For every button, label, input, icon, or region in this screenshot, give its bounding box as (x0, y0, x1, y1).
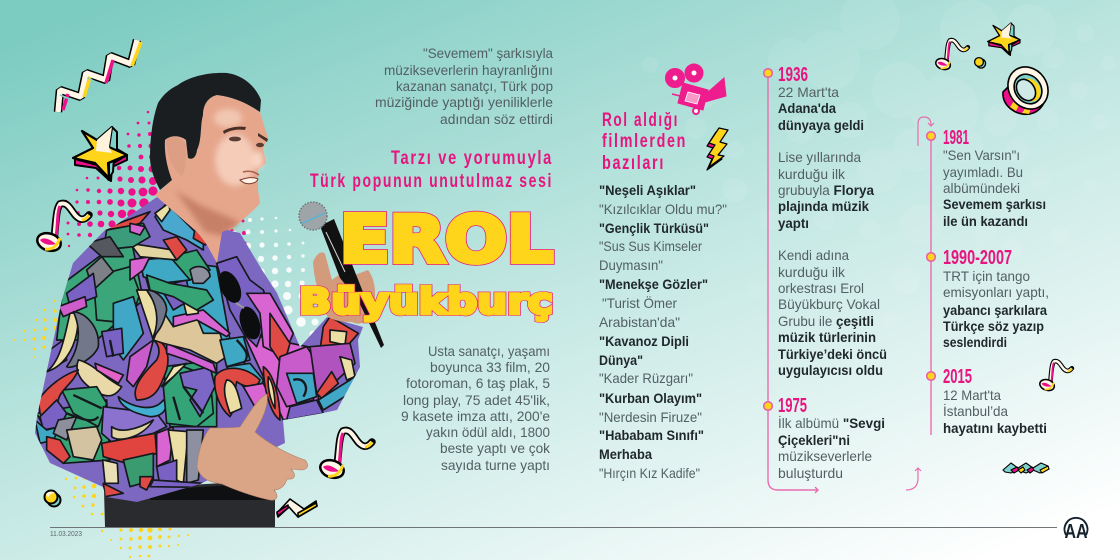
icon: zigzag near pants (277, 499, 317, 517)
film list: "Hırçın Kız Kadife" (599, 466, 700, 481)
icon: ring (1000, 59, 1056, 117)
timeline entries 1: Büyükburç Vokal (778, 297, 880, 312)
timeline entries 1: orkestrası Erol (778, 281, 864, 296)
intro text: adından söz ettirdi (440, 112, 553, 127)
background bubbles (642, 0, 1116, 328)
date: 11.03.2023 (50, 529, 82, 538)
main title: name: EROL (340, 204, 553, 278)
timeline entries 2: 12 Mart'ta (943, 388, 1001, 403)
film list: Merhaba (599, 447, 652, 462)
icon: small dot top right (975, 58, 986, 68)
shirt (30, 190, 370, 510)
film list: Duymasın" (599, 258, 663, 273)
eyes, brows, mouth (223, 127, 268, 142)
timeline entries 1: Çiçekleri"ni (778, 433, 850, 448)
timeline entries 2: TRT için tango (943, 269, 1030, 284)
timeline markers 2 (927, 132, 935, 380)
main title: name: Büyükburç (299, 282, 553, 322)
film list: "Hababam Sınıfı" (599, 428, 704, 443)
biography text: boyunca 33 film, 20 (430, 360, 550, 375)
icon: large zigzag (58, 40, 141, 112)
film list: Dünya" (599, 353, 643, 368)
intro text: müziğinde yaptığı yeniliklerle (375, 95, 553, 110)
timeline line 1 (768, 73, 818, 493)
biography text: long play, 75 adet 45'lik, (403, 393, 550, 408)
subtitle: Tarzı ve yorumuyla (391, 148, 553, 169)
timeline entries 1: 22 Mart'ta (778, 85, 839, 100)
film list: "Kızılcıklar Oldu mu?" (599, 202, 727, 217)
biography text: 9 kasete imza attı, 200'e (401, 409, 550, 424)
halftone: pink dots (65, 111, 246, 247)
timeline entries 1: uygulayıcısı oldu (778, 363, 883, 378)
timeline entries 1: Türkiye’deki öncü (778, 347, 887, 362)
film list: "Kurban Olayım" (599, 391, 702, 406)
icon: star top right (988, 23, 1020, 55)
timeline entries 1: 1936 (778, 64, 808, 86)
timeline entries 1: müzikseverlerle (778, 449, 872, 464)
photo: man with microphone (30, 73, 384, 527)
timeline entries 1: yaptı (778, 216, 809, 231)
timeline entries 1: İlk albümü "Sevgi (778, 414, 885, 431)
timeline entries 1: Adana'da (778, 101, 836, 116)
main title: name (299, 204, 553, 322)
icon: music note top right (934, 40, 968, 71)
biography text (401, 344, 550, 473)
intro text: kazanan sanatçı, Türk pop (396, 79, 553, 94)
skin: face and neck (155, 95, 268, 270)
intro text: "Sevemem" şarkısıyla (423, 46, 553, 61)
timeline entries 1: müzik türlerinin (778, 330, 876, 345)
upper hand (313, 252, 375, 324)
lower hand (197, 394, 308, 500)
halftone: yellow dots (14, 300, 189, 558)
timeline entries 1: kurduğu ilk (778, 265, 845, 280)
pants (104, 480, 275, 527)
timeline entries 2: albümündeki (943, 181, 1020, 196)
timeline entries 1: kurduğu ilk (778, 167, 845, 182)
timeline entries 1 (778, 64, 887, 481)
film list: "Kavanoz Dipli (599, 334, 689, 349)
sunglasses (214, 268, 264, 342)
hair (150, 73, 261, 190)
biography text: sayıda turne yaptı (441, 458, 550, 473)
icon: music note left (35, 203, 89, 254)
timeline entries 2: emisyonları yaptı, (943, 285, 1049, 300)
films heading (602, 110, 687, 174)
microphone (299, 202, 384, 348)
timeline entries 2: 2015 (943, 366, 972, 388)
film list: "Gençlik Türküsü" (599, 221, 709, 236)
ear (166, 137, 186, 176)
timeline entries 1: Kendi adına (778, 248, 849, 263)
timeline entries 1: Grubu ile çeşitli (778, 314, 874, 329)
biography text: fotoroman, 6 taş plak, 5 (406, 376, 550, 391)
footer rule (50, 527, 1057, 528)
film list: "Nerdesin Firuze" (599, 410, 702, 425)
main title: name: Büyükburç (299, 282, 553, 322)
face shading (175, 109, 263, 236)
films heading: Rol aldığı (602, 110, 679, 131)
films heading: bazıları (602, 153, 665, 174)
timeline entries 2: Sevemem şarkısı (943, 197, 1046, 212)
halftone: white dots (232, 217, 318, 338)
icon: music note lower (318, 430, 372, 481)
timeline entries 1: 1975 (778, 395, 807, 417)
icon: film camera (666, 64, 726, 114)
film list: "Turist Ömer (602, 294, 677, 311)
timeline entries 2: yabancı şarkılara (943, 303, 1047, 318)
intro text: müzikseverlerin hayranlığını (384, 63, 553, 78)
biography text: Usta sanatçı, yaşamı (428, 344, 550, 359)
logo: AA: AA (1064, 521, 1088, 543)
film list: "Menekşe Gözler" (599, 277, 708, 292)
timeline entries 2: yayımladı. Bu (943, 165, 1023, 180)
icon: small dot left (44, 490, 60, 506)
belt (150, 484, 274, 500)
film list: Arabistan'da" (599, 315, 680, 330)
subtitle: Türk popunun unutulmaz sesi (310, 171, 553, 192)
film list (599, 183, 727, 481)
intro text (375, 46, 553, 127)
timeline line 2 (930, 136, 932, 435)
timeline entries 2: Türkçe söz yazıp (943, 319, 1044, 334)
icon: small zigzag lower right (1003, 463, 1049, 473)
timeline entries 1: plajında müzik (778, 199, 869, 214)
timeline entries 2 (943, 127, 1049, 436)
biography text: beste yaptı ve çok (440, 441, 550, 456)
films heading: filmlerden (602, 131, 687, 152)
timeline entries 2: İstanbul’da (943, 402, 1008, 419)
biography text: yakın ödül aldı, 1800 (426, 425, 550, 440)
icon: large star (73, 127, 127, 181)
timeline entries 2: ile ün kazandı (943, 214, 1028, 229)
timeline entries 1: dünyaya geldi (778, 118, 864, 133)
film list: "Neşeli Aşıklar" (599, 183, 696, 198)
timeline entries 2: hayatını kaybetti (943, 421, 1047, 436)
subtitle (310, 148, 553, 192)
film list: "Kader Rüzgarı" (599, 371, 693, 386)
timeline entries 1: grubuyla Florya (778, 183, 874, 198)
icon: music note lower right (1038, 361, 1072, 392)
timeline entries 2: 1990-2007 (943, 247, 1012, 269)
main title: name: EROL (340, 204, 553, 278)
timeline entries 2: seslendirdi (943, 335, 1007, 350)
connector arrows (906, 117, 934, 490)
film list: "Sus Sus Kimseler (599, 239, 702, 254)
icon: lightning (707, 128, 728, 170)
timeline markers 1 (764, 69, 772, 410)
timeline entries 2: 1981 (943, 127, 969, 149)
timeline entries 1: buluşturdu (778, 466, 843, 481)
timeline entries 1: Lise yıllarında (778, 150, 861, 165)
timeline entries 2: "Sen Varsın"ı (943, 148, 1020, 163)
